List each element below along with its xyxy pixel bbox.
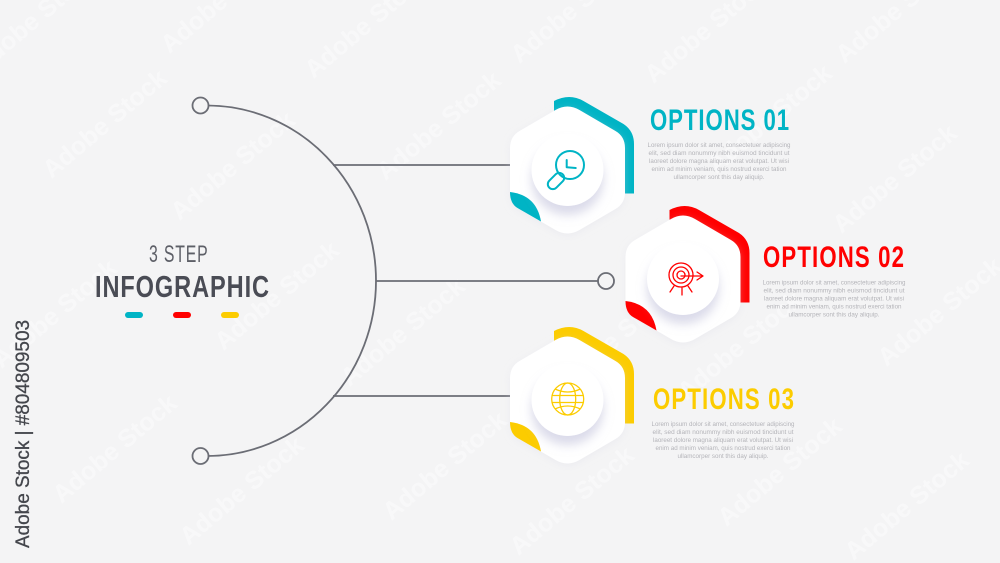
text block: options 01 bbox=[648, 142, 791, 181]
watermark pattern: Adobe Stock bbox=[165, 106, 300, 226]
subtitle: 3 step: 3 STEP bbox=[149, 242, 208, 268]
text block: options 03: laoreet dolore magna aliquam erat volutpat. Ut wisi bbox=[653, 437, 793, 444]
watermark pattern: Adobe Stock bbox=[504, 441, 639, 561]
yellow band bbox=[554, 327, 634, 424]
watermark pattern: Adobe Stock bbox=[672, 286, 807, 406]
yellow leaf bbox=[510, 422, 541, 452]
watermark pattern: Adobe Stock bbox=[371, 66, 506, 186]
watermark pattern: Adobe Stock bbox=[839, 446, 974, 563]
text block: options 01: ullamcorper sont this day aliquip. bbox=[674, 174, 765, 181]
watermark pattern: Adobe Stock bbox=[702, 59, 837, 179]
connector node 2 bbox=[598, 273, 614, 289]
vertical stock label: Adobe Stock | #804809503 bbox=[13, 320, 34, 548]
red leaf bbox=[626, 301, 656, 330]
connector line 2 bbox=[376, 280, 598, 282]
teal leaf bbox=[510, 192, 541, 222]
watermark pattern: Adobe Stock bbox=[712, 412, 847, 532]
watermark pattern: Adobe Stock bbox=[209, 236, 344, 356]
circle bbox=[532, 364, 604, 436]
panel: option 3 hexagon bbox=[510, 327, 634, 464]
heading: options 02: OPTIONS 02 bbox=[763, 240, 904, 274]
watermark pattern: Adobe Stock bbox=[174, 431, 309, 551]
watermark pattern: Adobe Stock bbox=[377, 406, 512, 526]
text block: options 01: enim ad minim veniam, quis nostrud exerci tation bbox=[652, 166, 787, 173]
connector line 3 bbox=[333, 395, 512, 397]
text block: options 03: ullamcorper sont this day aliquip. bbox=[678, 453, 769, 460]
text block: options 03 bbox=[652, 421, 795, 460]
panel: option 1 hexagon bbox=[510, 97, 634, 234]
red band bbox=[670, 206, 750, 302]
text block: options 03: Lorem ipsum dolor sit amet, consectetuer adipiscing bbox=[652, 421, 795, 428]
heading: options 01: OPTIONS 01 bbox=[650, 103, 789, 137]
text block: options 03: elit, sed diam nonummy nibh euismod tincidunt ut bbox=[652, 429, 794, 436]
node: top of arc bbox=[192, 98, 208, 114]
text block: options 01: laoreet dolore magna aliquam erat volutpat. Ut wisi bbox=[649, 158, 789, 165]
node: bottom of arc bbox=[192, 448, 208, 464]
text block: options 02: elit, sed diam nonummy nibh euismod tincidunt ut bbox=[764, 288, 905, 294]
text block: options 01: Lorem ipsum dolor sit amet, consectetuer adipiscing bbox=[648, 142, 791, 149]
circle bbox=[532, 134, 604, 206]
panel: option 2 hexagon bbox=[626, 206, 750, 342]
text block: options 01: elit, sed diam nonummy nibh euismod tincidunt ut bbox=[648, 150, 790, 157]
watermark pattern: Adobe Stock bbox=[37, 64, 172, 184]
title: infographic: INFOGRAPHIC bbox=[95, 269, 269, 304]
colour bars bbox=[125, 312, 239, 318]
semicircle connector bbox=[207, 106, 376, 456]
circle bbox=[647, 243, 719, 315]
text block: options 02: enim ad minim veniam, quis nostrud exerci tation bbox=[766, 304, 902, 310]
watermark pattern: Adobe Stock bbox=[547, 279, 682, 399]
white hexagon bbox=[510, 336, 625, 464]
connector line 1 bbox=[333, 164, 512, 166]
teal band bbox=[554, 97, 634, 194]
watermark pattern: Adobe Stock bbox=[827, 119, 962, 239]
watermark pattern: Adobe Stock bbox=[47, 389, 182, 509]
white hexagon bbox=[626, 216, 740, 342]
watermark pattern: Adobe Stock bbox=[335, 272, 470, 392]
text block: options 02 bbox=[762, 280, 906, 318]
icon: globe bbox=[552, 383, 584, 415]
icon: target with arrow bbox=[669, 263, 703, 295]
heading: options 03: OPTIONS 03 bbox=[653, 382, 794, 416]
icon: magnifier clock bbox=[546, 151, 584, 191]
white hexagon bbox=[510, 106, 625, 234]
text block: options 02: laoreet dolore magna aliquam erat volutpat. Ut wisi bbox=[764, 296, 904, 302]
text block: options 02: Lorem ipsum dolor sit amet, consectetuer adipiscing bbox=[762, 280, 906, 286]
text block: options 02: ullamcorper sont this day aliquip. bbox=[788, 312, 880, 318]
text block: options 03: enim ad minim veniam, quis nostrud exerci tation bbox=[656, 445, 791, 452]
